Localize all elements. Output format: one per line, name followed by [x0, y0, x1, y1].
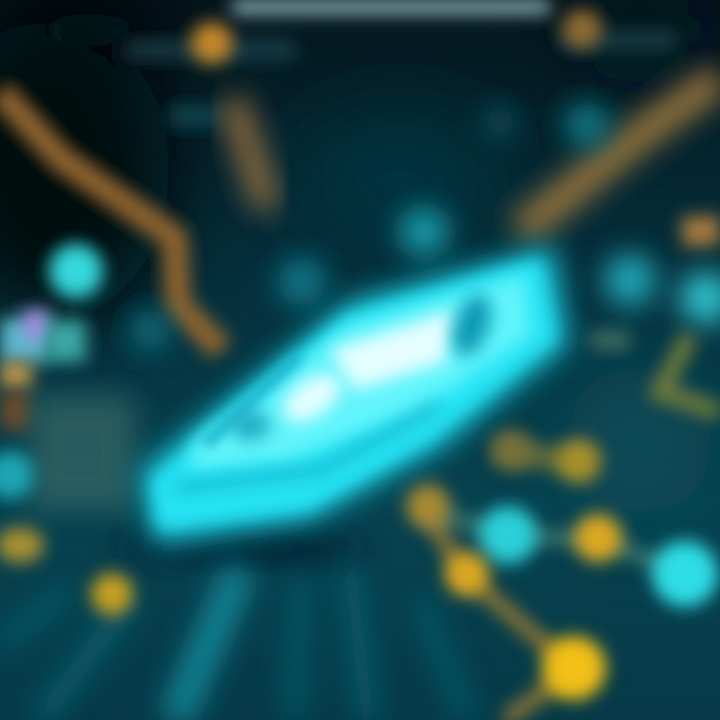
inner slab dark marks: [445, 289, 499, 361]
right-side bracket traces: [590, 230, 720, 412]
background shading: [0, 0, 715, 562]
left cluster: [0, 244, 170, 563]
header: blurred title band: [125, 0, 675, 128]
orange trace left: [0, 92, 222, 350]
network traces lower right: [425, 450, 690, 720]
teal glows above centre: [278, 103, 720, 324]
central glowing slab: [140, 245, 570, 545]
lower streaks: [0, 570, 468, 720]
header dots: [191, 9, 602, 64]
orange diagonal trace top centre: [232, 100, 268, 208]
network nodes: [91, 430, 718, 700]
orange trace right: [520, 78, 720, 232]
inner slab highlights: [330, 310, 455, 390]
